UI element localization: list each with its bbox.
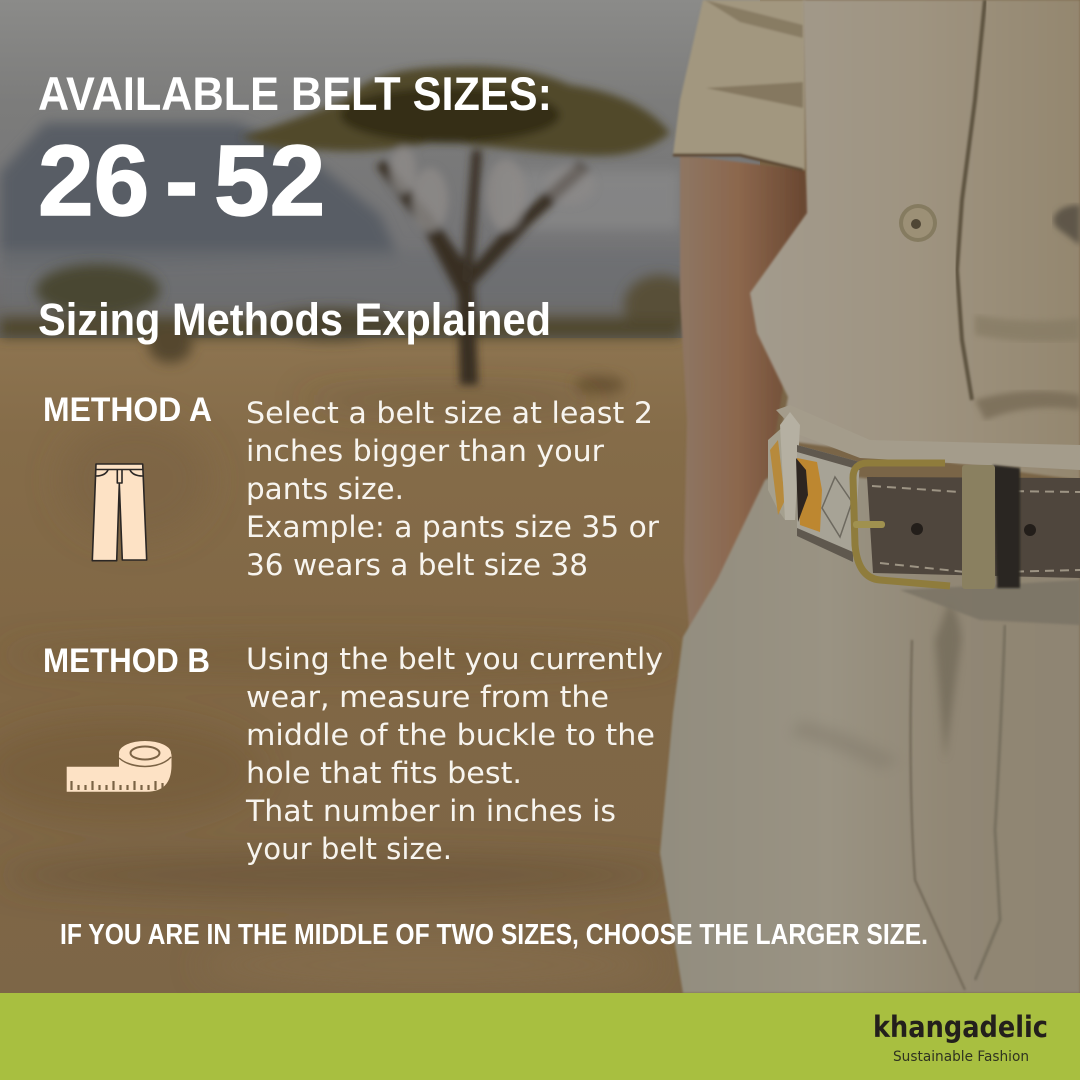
callout: sizing tip: IF YOU ARE IN THE MIDDLE OF TWO SIZES, CHOOSE THE LARGER SIZE. — [60, 919, 928, 951]
text: method A description — [246, 396, 659, 582]
text: method B description: middle of the buckle to the — [246, 718, 655, 752]
arm — [680, 155, 810, 640]
size range: - — [165, 125, 198, 237]
text: method B description: That number in inches is — [245, 794, 616, 828]
text: method B description: wear, measure from the — [246, 680, 609, 714]
photo: person in safari outfit with beaded belt — [660, 0, 1080, 993]
footer band — [0, 993, 1080, 1080]
heading: available belt sizes: AVAILABLE BELT SIZES: — [38, 67, 552, 120]
heading: sizing methods: Sizing Methods Explained — [38, 294, 551, 345]
background photo: savanna landscape — [0, 0, 760, 998]
shirt button — [899, 204, 937, 242]
text: method B description — [245, 642, 663, 866]
text: method A description: inches bigger than your — [246, 434, 604, 468]
shirt — [750, 0, 1080, 480]
logo: khangadelic — [873, 1010, 1048, 1065]
belt — [768, 405, 1080, 589]
logo: khangadelic: khangadelic — [873, 1010, 1048, 1044]
trousers — [660, 470, 1080, 993]
icon: trousers — [92, 464, 147, 561]
icon: measuring tape — [67, 741, 172, 792]
label: method B: METHOD B — [43, 642, 210, 680]
size range: 26 — [38, 125, 149, 237]
text: method B description: your belt size. — [246, 832, 452, 866]
text: method A description: 36 wears a belt size 38 — [246, 548, 588, 582]
text: method B description: Using the belt you currently — [246, 642, 663, 676]
size range: 52 — [214, 125, 325, 237]
label: method A: METHOD A — [43, 391, 212, 429]
logo: khangadelic: Sustainable Fashion — [893, 1049, 1029, 1065]
text: method A description: pants size. — [246, 472, 404, 506]
text: method A description: Select a belt size at least 2 — [246, 396, 653, 430]
ground shading — [0, 393, 680, 990]
text: method B description: hole that fits best. — [246, 756, 522, 790]
text: method A description: Example: a pants size 35 or — [246, 510, 659, 544]
rolled sleeve — [673, 0, 805, 170]
